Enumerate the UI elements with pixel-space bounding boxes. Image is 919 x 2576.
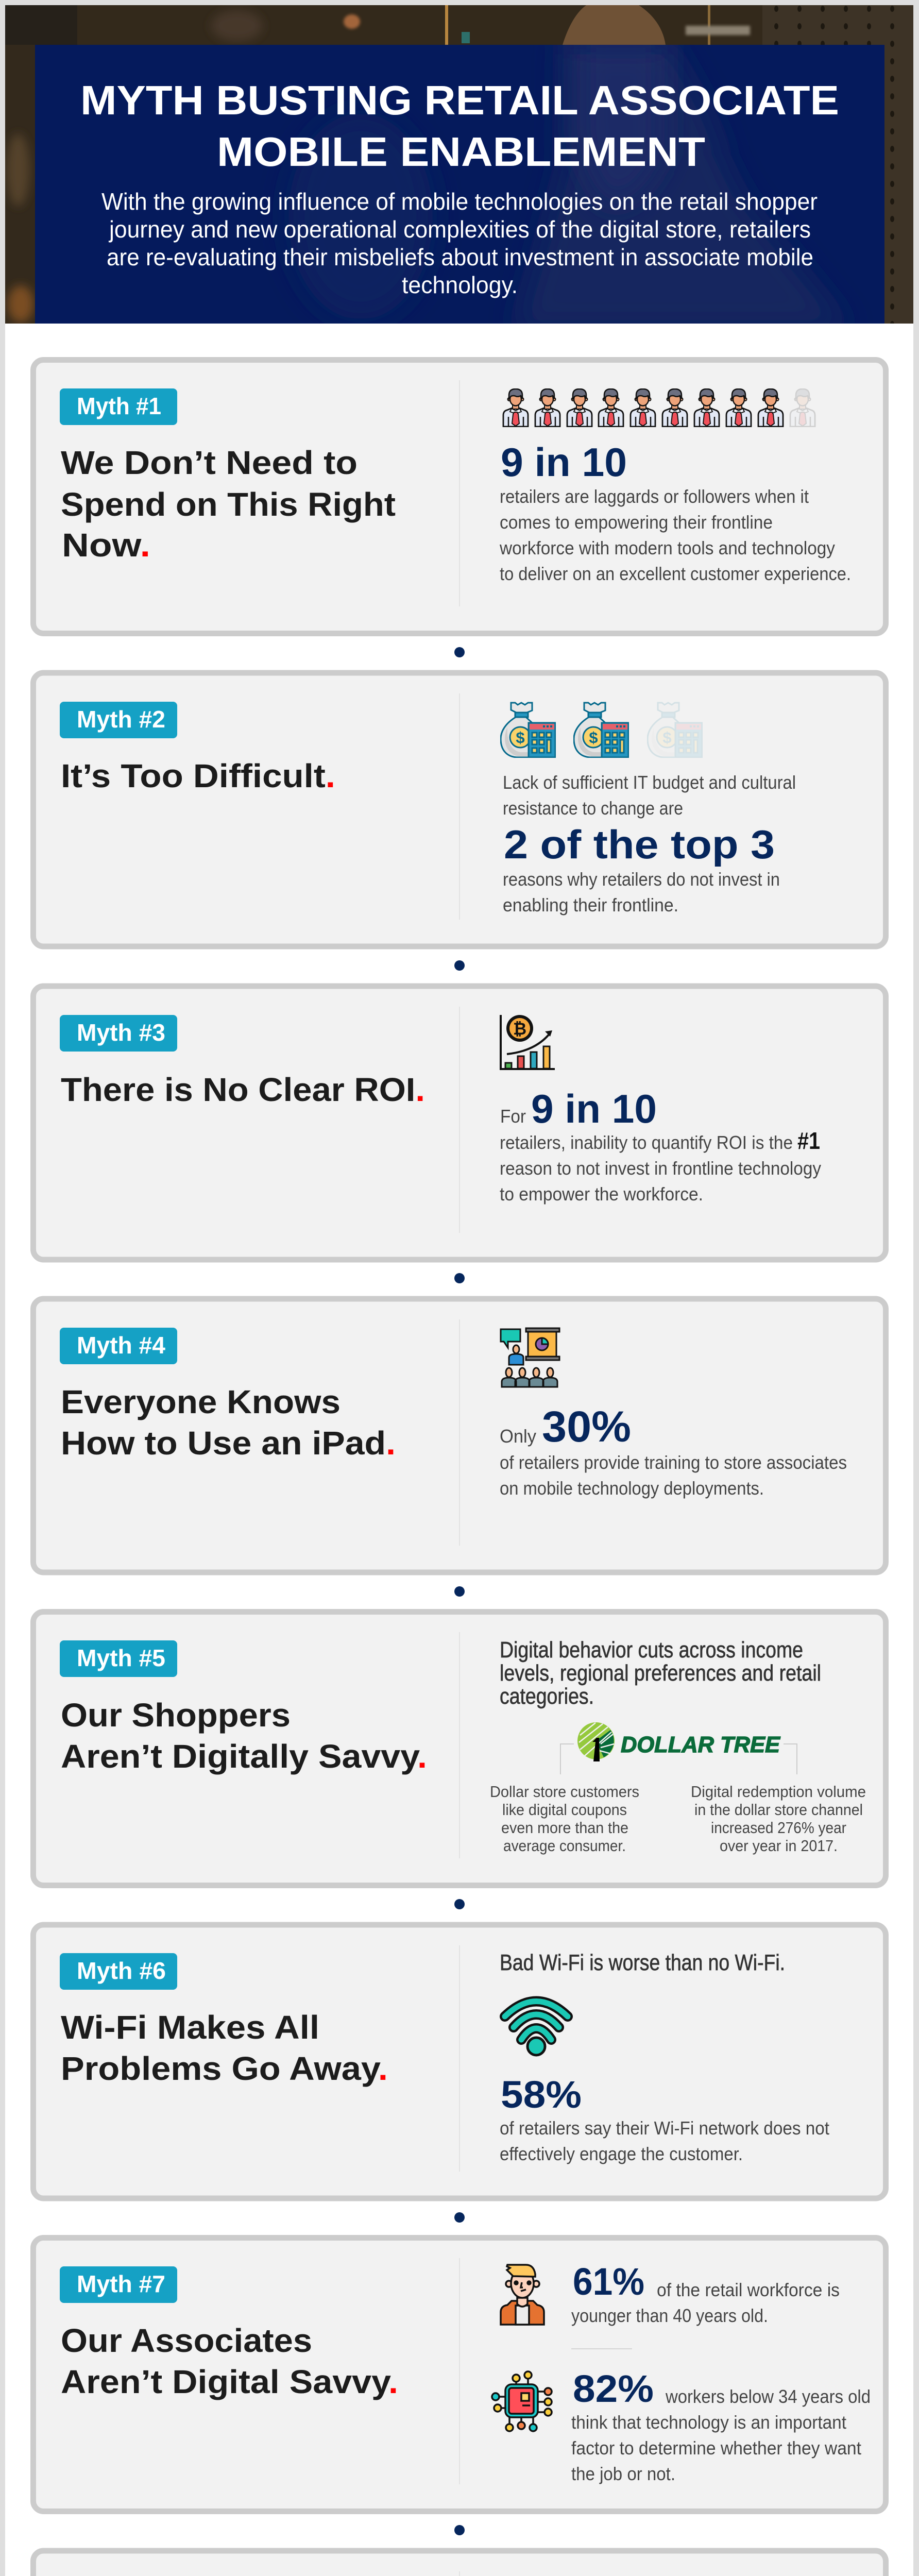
heading: myth 7: Aren’t Digital Savvy . <box>61 2363 398 2400</box>
connector dot <box>454 1273 465 1283</box>
icon: wifi <box>505 2001 568 2055</box>
badge: myth 5 <box>60 1640 177 1677</box>
heading: myth 6 <box>61 2009 388 2087</box>
text: myth 3 body <box>500 1127 821 1205</box>
intro paragraph: technology. <box>402 272 518 298</box>
title: MOBILE ENABLEMENT <box>217 129 705 175</box>
heading: myth 4: Everyone Knows <box>61 1383 341 1420</box>
text: myth 1 body: to deliver on an excellent customer experience. <box>500 563 851 584</box>
badge: myth 6 <box>60 1953 177 1990</box>
heading: myth 4 <box>61 1383 396 1462</box>
text: dollar store customers: even more than the <box>501 1819 628 1837</box>
hero banner <box>5 5 913 330</box>
badge: myth 1 <box>60 388 177 425</box>
connector dot <box>454 1899 465 1909</box>
panel: myth 6 <box>33 1925 886 2198</box>
panel: myth 2 <box>33 673 886 946</box>
text: retail workforce <box>571 2279 840 2326</box>
heading: myth 1 <box>61 444 396 564</box>
text: myth 2 body: reasons why retailers do not invest in <box>503 869 780 890</box>
intro paragraph <box>101 188 818 298</box>
stat: only 30% <box>500 1402 631 1451</box>
logo: dollar tree <box>577 1722 781 1761</box>
text: retail workforce: younger than 40 years old. <box>571 2305 768 2326</box>
text: workers below 34 <box>571 2386 871 2484</box>
heading: myth 7 <box>61 2322 398 2400</box>
panel: myth 4 <box>33 1299 886 1572</box>
hero navy panel <box>35 45 884 330</box>
connector dot <box>454 960 465 971</box>
heading: myth 5: Aren’t Digitally Savvy . <box>61 1738 427 1775</box>
badge: myth 2 <box>60 702 177 738</box>
title <box>80 77 839 175</box>
text: myth 5 lead: categories. <box>500 1684 594 1709</box>
stat: 58%: 58% <box>501 2073 582 2116</box>
text: myth 4 body <box>500 1452 847 1499</box>
text: myth 2 lead <box>503 772 796 819</box>
logo: dollar tree: DOLLAR TREE <box>621 1732 781 1757</box>
heading: myth 1: Now . <box>62 527 150 564</box>
text: dollar store customers <box>490 1783 639 1855</box>
text: myth 2 body <box>503 869 780 916</box>
icon: bitcoin growth chart: ₿ <box>513 1020 526 1038</box>
text: workers below 34: think that technology is an important <box>571 2412 846 2433</box>
text: digital redemption volume: Digital redemption volume <box>691 1783 866 1801</box>
intro paragraph: With the growing influence of mobile technologies on the retail shopper <box>101 188 818 215</box>
text: myth 6 body <box>500 2117 829 2164</box>
text: digital redemption volume: in the dollar store channel <box>694 1801 863 1819</box>
badge: myth 3 <box>60 1015 177 1052</box>
text: dollar store customers: Dollar store customers <box>490 1783 639 1801</box>
stat: 2 of the top 3: 2 of the top 3 <box>504 822 775 867</box>
stat: 61%: 61% <box>573 2260 644 2303</box>
badge: myth 5: Myth #5 <box>77 1645 165 1671</box>
text: myth 5 lead: levels, regional preferences and retail <box>500 1660 821 1686</box>
text: workers below 34: the job or not. <box>571 2463 675 2484</box>
title: MYTH BUSTING RETAIL ASSOCIATE <box>80 77 839 123</box>
badge: myth 7 <box>60 2266 177 2303</box>
text: dollar store customers: average consumer. <box>503 1837 626 1855</box>
text: myth 2 lead: resistance to change are <box>503 798 683 819</box>
heading: myth 4: How to Use an iPad . <box>61 1425 396 1462</box>
connector dot <box>454 1586 465 1597</box>
hero photo background <box>5 5 913 324</box>
icon: bitcoin growth chart <box>501 1015 555 1069</box>
text: myth 1 body <box>499 486 851 584</box>
heading: myth 6: Wi-Fi Makes All <box>61 2009 319 2046</box>
icon: 9 of 10 people <box>503 389 815 427</box>
panel: myth 7 <box>33 2238 886 2511</box>
badge: myth 7: Myth #7 <box>77 2270 165 2297</box>
heading: myth 3: There is No Clear ROI . <box>61 1071 425 1108</box>
text: retail workforce: of the retail workforce is <box>657 2279 840 2300</box>
panel: myth 1 <box>33 360 886 634</box>
heading: myth 5 <box>61 1697 427 1775</box>
badge: myth 4 <box>60 1328 177 1364</box>
text: myth 3 body: retailers, inability to quantify ROI is the <box>500 1132 793 1153</box>
icon: money bags <box>501 703 702 757</box>
text: myth 3 body: to empower the workforce. <box>500 1183 703 1205</box>
heading: myth 1: We Don’t Need to <box>61 444 358 481</box>
panel: myth 8 <box>33 2551 886 2576</box>
heading: myth 7: Our Associates <box>61 2322 312 2359</box>
panel: myth 5 <box>33 1612 886 1886</box>
heading: myth 6: Problems Go Away . <box>61 2050 388 2087</box>
badge: myth 2: Myth #2 <box>77 706 165 733</box>
stat: 9 in 10: 9 in 10 <box>501 439 627 485</box>
text: myth 6 body: effectively engage the customer. <box>500 2143 743 2164</box>
text: myth 1 body: retailers are laggards or followers when it <box>500 486 809 507</box>
text: dollar store customers: like digital coupons <box>502 1801 627 1819</box>
icon: presenter and audience <box>501 1328 559 1387</box>
text: myth 3 body: reason to not invest in frontline technology <box>500 1158 821 1179</box>
icon: young associate <box>501 2265 544 2325</box>
text: workers below 34: workers below 34 years old <box>665 2386 871 2407</box>
text: myth 6 body: of retailers say their Wi-Fi network does not <box>500 2117 829 2139</box>
connector dot <box>454 2212 465 2223</box>
text: digital redemption volume: increased 276% year <box>711 1819 846 1837</box>
text: myth 1 body: comes to empowering their frontline <box>500 512 773 533</box>
text: myth 4 body: on mobile technology deployments. <box>500 1478 764 1499</box>
text: workers below 34: factor to determine whether they want <box>571 2437 861 2459</box>
text: digital redemption volume: over year in 2017. <box>720 1837 838 1855</box>
text: myth 5 lead <box>500 1637 821 1709</box>
text: myth 1 body: workforce with modern tools and technology <box>499 537 835 558</box>
badge: myth 4: Myth #4 <box>77 1332 165 1359</box>
intro paragraph: are re-evaluating their misbeliefs about investment in associate mobile <box>107 244 813 270</box>
text: myth 5 lead: Digital behavior cuts across income <box>500 1637 803 1663</box>
badge: myth 6: Myth #6 <box>77 1957 166 1984</box>
connector dot <box>454 647 465 657</box>
text: myth 2 body: enabling their frontline. <box>503 894 678 916</box>
heading: myth 1: Spend on This Right <box>61 486 396 523</box>
intro paragraph: journey and new operational complexities of the digital store, retailers <box>108 216 811 243</box>
badge: myth 3: Myth #3 <box>77 1019 165 1046</box>
icon: chip <box>492 2371 552 2431</box>
stat: for 9 in 10: 9 in 10 <box>531 1086 657 1131</box>
text: myth 4 body: of retailers provide training to store associates <box>500 1452 847 1473</box>
panel: myth 3 <box>33 986 886 1260</box>
badge: myth 1: Myth #1 <box>77 393 161 419</box>
text: digital redemption volume <box>691 1783 866 1855</box>
stat: only 30%: 30% <box>542 1402 631 1451</box>
stat: 82%: 82% <box>573 2367 654 2410</box>
stat: only 30%: Only <box>500 1426 536 1447</box>
stat: for 9 in 10: For <box>500 1106 526 1127</box>
text: myth 3 body: #1 <box>797 1127 820 1154</box>
bracket <box>560 1744 797 1774</box>
connector dot <box>454 2525 465 2535</box>
heading: myth 2: It’s Too Difficult . <box>61 757 335 794</box>
heading: myth 5: Our Shoppers <box>61 1697 291 1734</box>
text: bad wi-fi: Bad Wi-Fi is worse than no Wi-Fi. <box>500 1950 785 1975</box>
text: myth 2 lead: Lack of sufficient IT budget and cultural <box>503 772 796 793</box>
